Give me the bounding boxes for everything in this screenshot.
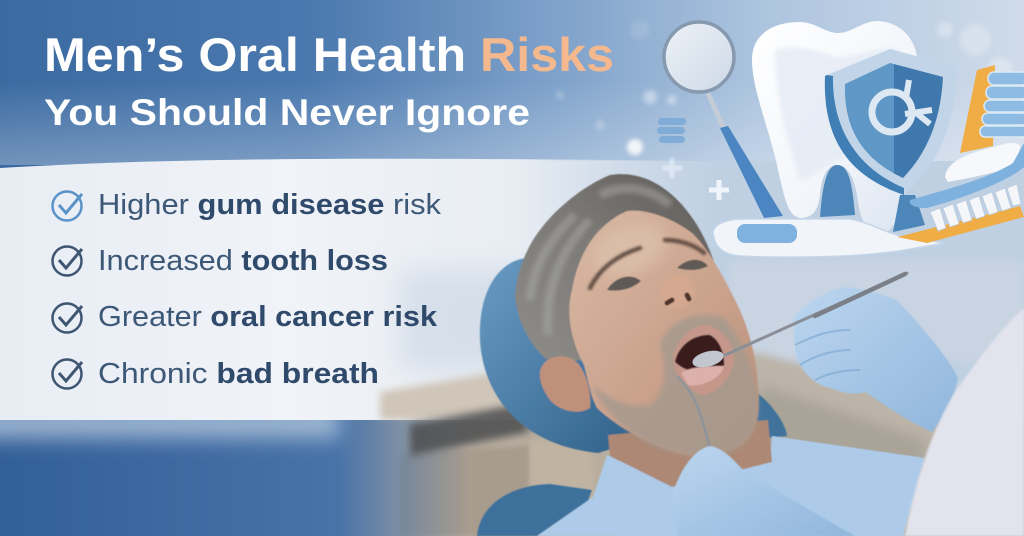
bokeh sparkles (556, 20, 1013, 155)
hand mirror (664, 22, 734, 92)
panel: white list band (0, 159, 720, 420)
tooth icon (752, 21, 917, 234)
panel: clinic backdrop behind the man (500, 161, 1024, 536)
blue gap under shield (893, 195, 925, 232)
toothbrush handle (713, 219, 945, 257)
nose (660, 274, 694, 308)
hair highlights (530, 188, 670, 335)
hair (515, 174, 716, 362)
tooth root shadow (820, 165, 855, 217)
brows (590, 240, 704, 288)
toothbrush blue stripe (737, 224, 797, 243)
shirt (537, 436, 925, 536)
toothbrush orange accent (897, 206, 1024, 243)
bristles (930, 184, 1021, 231)
instrument: explorer probe (677, 376, 728, 510)
title line one: Men’s Oral Health Risks (44, 28, 614, 81)
chair back right side (745, 385, 787, 440)
toothpaste (945, 143, 1020, 182)
glove: lower hand (670, 446, 855, 536)
tooth inner shading (775, 47, 900, 180)
neck (608, 420, 772, 487)
bottom blue band (0, 420, 470, 536)
second brush orange back (960, 65, 995, 153)
eyes (607, 260, 708, 291)
instrument: dental mirror in mouth (691, 273, 907, 370)
forehead light (586, 214, 674, 286)
small floating blue bristles (657, 118, 686, 143)
stubble (592, 315, 758, 455)
clinic counter and cabinets (300, 368, 620, 536)
hand mirror handle (708, 93, 723, 127)
item: bad breath: Chronic bad breath (98, 358, 379, 390)
face (569, 211, 759, 456)
second brush blue bristles (980, 72, 1024, 137)
lower chair back (477, 484, 592, 536)
brush head (910, 143, 1024, 208)
chair headrest (480, 258, 640, 453)
tongue and lower teeth (681, 366, 724, 386)
item: tooth loss: Increased tooth loss (98, 245, 388, 277)
title (44, 28, 614, 133)
lips (673, 325, 734, 395)
item: gum disease: Higher gum disease risk (98, 189, 442, 221)
ear (540, 356, 590, 412)
title line two: You Should Never Ignore (44, 92, 530, 133)
item: oral cancer: Greater oral cancer risk (98, 301, 438, 333)
nostrils (667, 295, 689, 303)
glove: upper right hand (793, 287, 958, 432)
glove finger shading (795, 330, 860, 380)
shield icon (825, 49, 957, 195)
plus sparkle faint (662, 158, 682, 178)
mouth interior (675, 335, 724, 373)
checklist (52, 189, 442, 390)
counter dark strip (410, 404, 530, 456)
bottom band highlight (0, 408, 340, 438)
blurred wash behind the list (400, 270, 550, 370)
doctor white coat (905, 308, 1024, 536)
plus sparkle (709, 180, 729, 200)
hand mirror grip (720, 126, 783, 218)
illustration: dental tools and tooth (657, 21, 1024, 257)
banner lower wash (0, 80, 1024, 165)
illustration: man in dental chair (477, 174, 925, 536)
